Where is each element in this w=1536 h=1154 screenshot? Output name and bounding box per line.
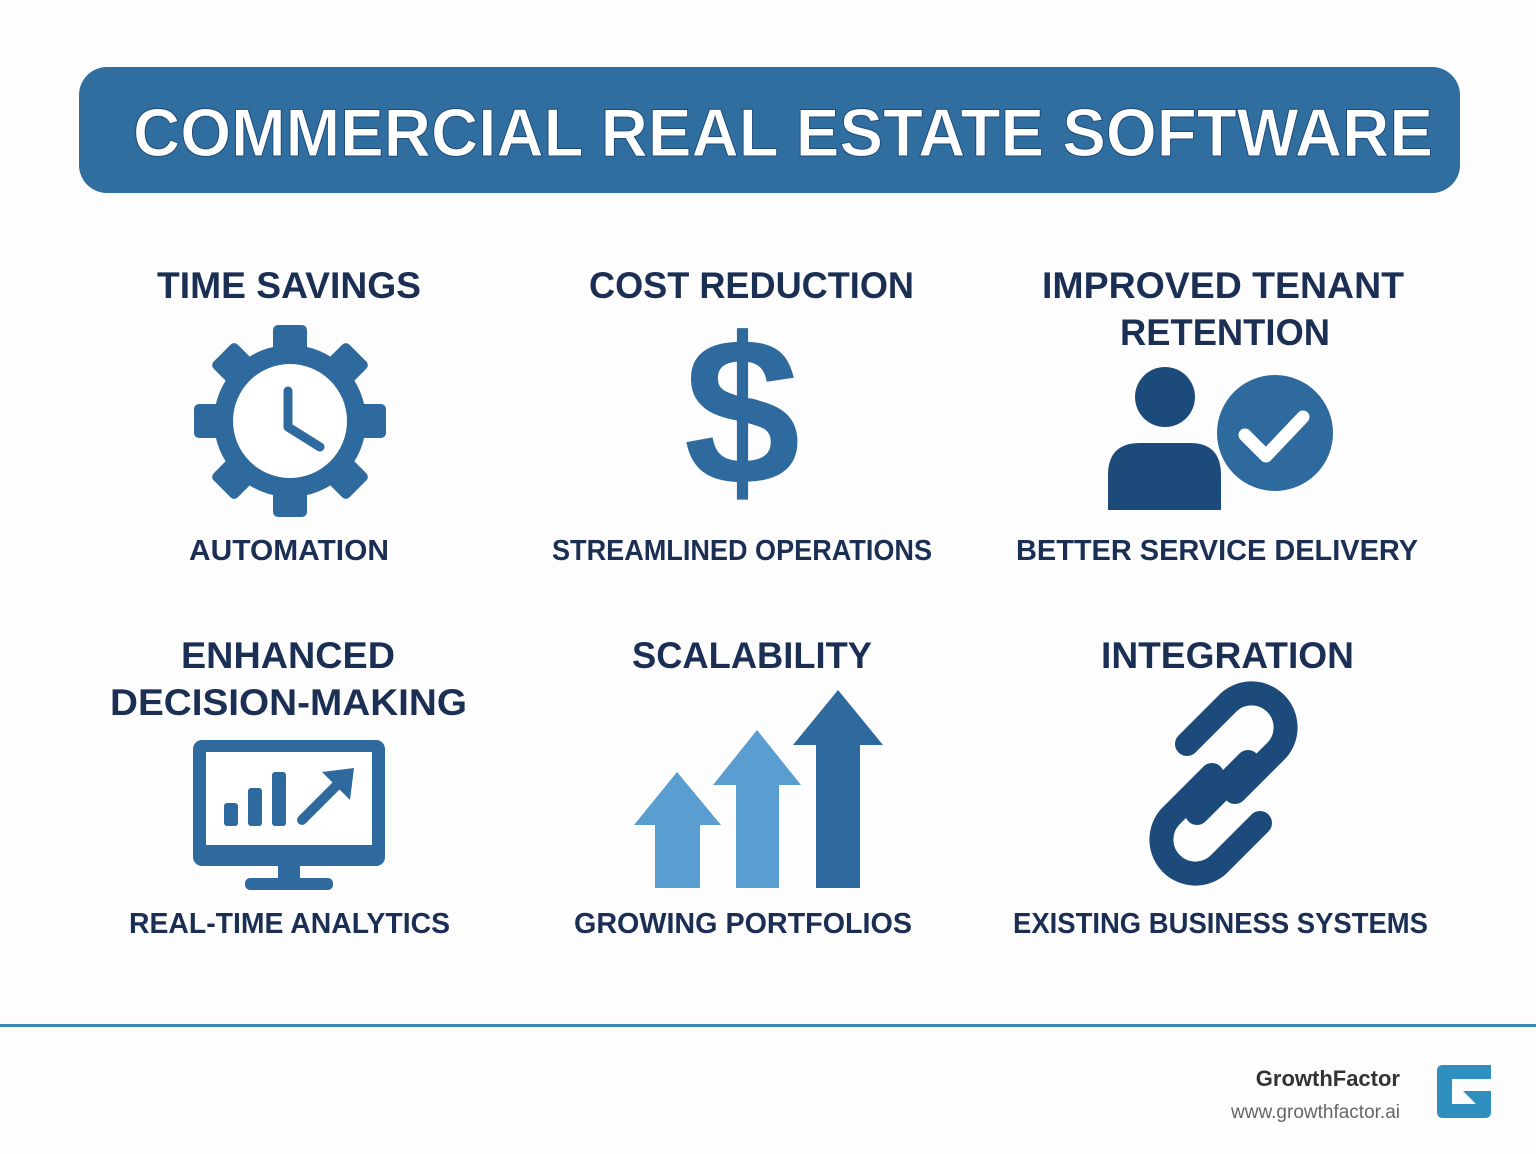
icon: G logo — [1437, 1065, 1491, 1118]
icon: chain link — [1161, 693, 1286, 874]
heading: time savings: TIME SAVINGS — [157, 265, 421, 306]
footer brand: www.growthfactor.ai — [1230, 1102, 1400, 1123]
footer brand: GrowthFactor — [1256, 1066, 1400, 1091]
panel: time savings — [157, 265, 421, 567]
panel: tenant retention — [1016, 265, 1418, 567]
panel: cost reduction — [552, 265, 932, 567]
panel: decision-making — [110, 635, 467, 940]
subtitle: better service delivery: BETTER SERVICE DELIVERY — [1016, 535, 1418, 567]
subtitle: streamlined operations: STREAMLINED OPERATIONS — [552, 535, 932, 567]
panel: scalability — [574, 635, 912, 940]
subtitle: automation: AUTOMATION — [189, 535, 389, 567]
panel: decision-making: DECISION-MAKING — [110, 682, 467, 723]
icon: gear clock — [194, 325, 386, 517]
icon: person with check — [1108, 367, 1335, 510]
title banner: COMMERCIAL REAL ESTATE SOFTWARE — [133, 95, 1433, 171]
subtitle: growing portfolios: GROWING PORTFOLIOS — [574, 908, 912, 940]
subtitle: real-time analytics: REAL-TIME ANALYTICS — [129, 908, 450, 940]
heading: scalability: SCALABILITY — [632, 635, 872, 676]
subtitle: existing business systems: EXISTING BUSINESS SYSTEMS — [1013, 908, 1428, 940]
panel: tenant retention: RETENTION — [1120, 312, 1330, 353]
footer brand — [1230, 1065, 1491, 1123]
heading: cost reduction: COST REDUCTION — [589, 265, 914, 306]
icon: dollar sign: $ — [684, 294, 800, 529]
heading: integration: INTEGRATION — [1101, 635, 1354, 676]
panel: integration — [1013, 635, 1428, 940]
title banner — [79, 67, 1460, 193]
icon: rising arrows — [634, 690, 883, 888]
heading: improved tenant retention: IMPROVED TENANT — [1042, 265, 1404, 306]
icon: monitor chart — [193, 740, 385, 890]
heading: enhanced decision-making: ENHANCED — [181, 635, 395, 676]
